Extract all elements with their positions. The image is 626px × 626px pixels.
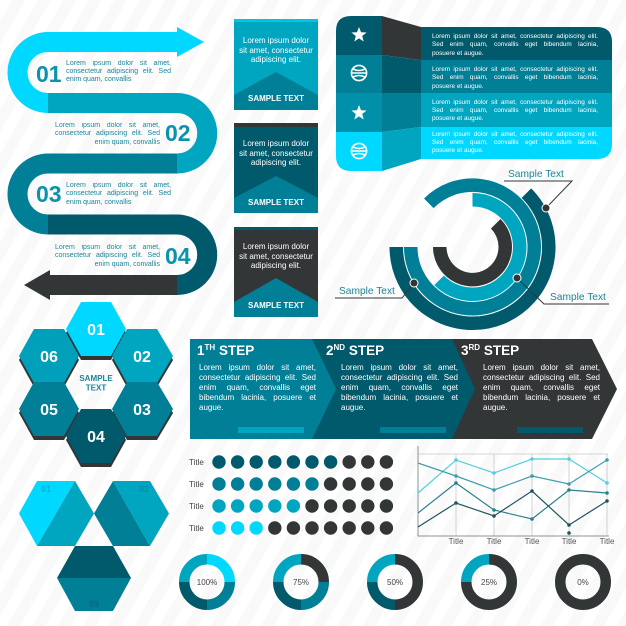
hexagon 03 split [57, 546, 131, 611]
segment 5 arrow [24, 270, 177, 300]
step 04 text: Lorem ipsum dolor sit amet, [55, 244, 160, 251]
step 3 body: Lorem ipsum dolor sit amet, [483, 363, 600, 372]
step 2 body: Lorem ipsum dolor sit amet, [341, 363, 458, 372]
hexagon 02 split: 02 [139, 484, 149, 494]
hexagon 05 [19, 382, 79, 436]
step 04 text: enim quam, convallis [95, 261, 160, 268]
callout top right [504, 169, 572, 212]
panel: sample card 2: sit amet, consectetur [239, 149, 313, 158]
step 3 bar [517, 427, 583, 433]
step 1 body [199, 363, 316, 415]
row text 4: Lorem ipsum dolor sit amet, consectetur adipiscing elit. [432, 130, 598, 138]
donut 100%: 100% [197, 578, 217, 587]
hexagon cluster [19, 302, 173, 467]
step 3 heading: 3RD STEP [461, 343, 519, 358]
step 03 text: Lorem ipsum dolor sit amet, [66, 182, 171, 189]
row 2 [189, 477, 393, 491]
center label: TEXT [86, 384, 106, 392]
step 3 body: enim quam, convallis eget [483, 383, 600, 392]
step 3 body: consectetur adipiscing elit. Sed [483, 373, 600, 382]
panel: sample card 1: Lorem ipsum dolor [243, 36, 309, 45]
step 01 number: 01 [36, 61, 62, 87]
row text 2: Sed enim quam, convallis eget bibendum lacinia, [432, 74, 598, 81]
step 1 body: bibendum lacinia, posuere et [199, 393, 316, 402]
axis labels: Title [449, 537, 464, 546]
row text 2: Lorem ipsum dolor sit amet, consectetur adipiscing elit. [432, 66, 598, 73]
dot matrix chart [189, 455, 393, 535]
row text 3: posuere et augue. [432, 115, 484, 122]
callout left [335, 279, 418, 298]
row 3: Title [189, 502, 204, 511]
step 1 heading: 1TH STEP [197, 343, 254, 358]
row text 4 [432, 130, 598, 156]
row text 1: posuere et augue. [432, 50, 484, 57]
callout lower right [513, 274, 609, 304]
step 02 text: enim quam, convallis [95, 139, 160, 146]
row text 3: Lorem ipsum dolor sit amet, consectetur adipiscing elit. [432, 98, 598, 106]
panel: sample card 3: adipiscing elit. [251, 261, 301, 270]
series 1 [418, 457, 609, 493]
ribbon folds [382, 16, 421, 171]
panel: sample card 1: sit amet, consectetur [239, 46, 313, 55]
step 03 text: enim quam, convallis [66, 199, 131, 206]
step 2 body: bibendum lacinia, posuere et [341, 393, 458, 402]
donut 75%: 75% [293, 578, 309, 587]
hexagon 02 [112, 329, 173, 383]
donut 100% [184, 559, 230, 605]
row 1 [189, 455, 393, 469]
step 1 body: Lorem ipsum dolor sit amet, [199, 363, 316, 372]
step 04 number: 04 [165, 243, 191, 269]
row text 2: posuere et augue. [432, 83, 484, 90]
segment 3 [17, 164, 177, 224]
hexagon 05: 05 [40, 402, 58, 419]
segment 2 [48, 103, 207, 164]
panel: sample card 2: SAMPLE TEXT [248, 198, 304, 207]
step 2 bar [380, 427, 446, 433]
donut 75% [278, 559, 324, 605]
hexagon 03 [112, 382, 173, 436]
hexagon 04: 04 [87, 429, 105, 446]
hexagon 01: 01 [87, 322, 105, 339]
row text 3 [432, 98, 598, 124]
hexagon 06 [19, 329, 79, 383]
axis labels: Title [600, 537, 615, 546]
panel: three step chevrons [190, 339, 617, 439]
step 3 body: bibendum lacinia, posuere et [483, 393, 600, 402]
step 04 text [55, 244, 160, 270]
hexagon 03 split: 03 [89, 599, 99, 609]
axis labels: Title [562, 537, 577, 546]
donut 25%: 25% [481, 578, 497, 587]
step 04 text: consectetur adipiscing elit. Sed [55, 252, 160, 259]
hexagon 01 [66, 302, 126, 356]
step 02 text: Lorem ipsum dolor sit amet, [55, 122, 160, 129]
hexagon 04 [66, 409, 126, 463]
radial arc chart [335, 169, 609, 323]
hexagon shadows [19, 306, 173, 467]
step 01 text: Lorem ipsum dolor sit amet, [66, 60, 171, 66]
step 03 text [66, 182, 171, 208]
step 01 text: consectetur adipiscing elit. Sed [66, 68, 171, 75]
callout left: Sample Text [339, 286, 395, 297]
hexagon 02: 02 [133, 349, 151, 366]
third arc [439, 200, 520, 294]
series 2 [418, 458, 609, 492]
panel: sample card 1 [234, 19, 318, 110]
panel: sample card 3: sit amet, consectetur [239, 252, 313, 261]
row 1: Title [189, 458, 204, 467]
hexagon 06: 06 [40, 349, 58, 366]
hexagon 03: 03 [133, 402, 151, 419]
hexagon 01 split [19, 481, 94, 546]
step 2 body [341, 363, 458, 415]
step 3 body [483, 363, 600, 415]
panel: sample card 3: Lorem ipsum dolor [243, 242, 309, 251]
step 3 body: augue. [483, 403, 507, 412]
step 1 bar [238, 427, 304, 433]
row text 3: Sed enim quam, convallis eget bibendum lacinia, [432, 107, 598, 114]
series 3 [418, 481, 609, 521]
step 2 body: enim quam, convallis eget [341, 383, 458, 392]
row text 2 [432, 66, 598, 92]
hexagon 02 split [94, 481, 169, 546]
step 3 chevron [440, 339, 617, 439]
step 2 heading: 2ND STEP [326, 343, 384, 358]
segment 1 arrow [18, 27, 204, 103]
donut 50% [372, 559, 418, 605]
donut 0% [560, 559, 606, 605]
row text 4: posuere et augue. [432, 147, 484, 154]
axis labels: Title [525, 537, 540, 546]
ribbon right rows [421, 27, 612, 159]
donut 50%: 50% [387, 578, 403, 587]
step 1 body: augue. [199, 403, 223, 412]
row 3 [189, 499, 393, 513]
row text 4: Sed enim quam, convallis eget bibendum lacinia, [432, 139, 598, 146]
step 01 text: enim quam, convallis [66, 76, 131, 83]
inner arc [440, 224, 505, 280]
row text 1: Lorem ipsum dolor sit amet, consectetur adipiscing elit. [432, 33, 598, 40]
step 2 body: augue. [341, 403, 365, 412]
row 4 [189, 521, 393, 535]
step 02 number: 02 [165, 120, 191, 146]
panel: sample card 2: adipiscing elit. [251, 158, 301, 167]
center label: SAMPLE [79, 374, 113, 383]
row text 1: Sed enim quam, convallis eget bibendum lacinia, [432, 41, 598, 48]
panel: folded ribbon list [336, 16, 612, 171]
segment 4 [48, 224, 207, 285]
step 02 text [55, 122, 160, 148]
split hexagon trio [19, 481, 169, 611]
callout lower right: Sample Text [550, 292, 606, 303]
step 1 body: consectetur adipiscing elit. Sed [199, 373, 316, 382]
step 03 text: consectetur adipiscing elit. Sed [66, 190, 171, 197]
step 2 body: consectetur adipiscing elit. Sed [341, 373, 458, 382]
hexagon 01 split: 01 [41, 484, 51, 494]
row 2: Title [189, 480, 204, 489]
panel: sample card 2: Lorem ipsum dolor [243, 139, 309, 148]
line chart [418, 446, 615, 546]
panel: sample card 3: SAMPLE TEXT [248, 301, 304, 310]
step 02 text: consectetur adipiscing elit. Sed [55, 130, 160, 137]
axis labels: Title [487, 537, 502, 546]
step 2 chevron [300, 339, 475, 439]
outer arc [396, 193, 549, 323]
step 1 chevron [190, 339, 336, 439]
row text 1 [432, 33, 598, 59]
donut 25% [466, 559, 512, 605]
second arc [411, 185, 534, 309]
step 1 body: enim quam, convallis eget [199, 383, 316, 392]
serpentine process arrow [17, 27, 207, 300]
icon: globe [351, 143, 367, 159]
step 01 text [66, 60, 171, 86]
series 4 [418, 489, 609, 535]
step 03 number: 03 [36, 181, 62, 207]
panel: sample card 1: SAMPLE TEXT [248, 94, 304, 103]
panel: sample card 2 [234, 123, 318, 213]
icon: globe [351, 65, 367, 81]
donut 0%: 0% [577, 578, 589, 587]
panel: sample card 1: adipiscing elit. [251, 55, 301, 64]
panel: sample card 3 [234, 227, 318, 317]
axis labels [449, 537, 615, 546]
ribbon left tabs [336, 16, 382, 171]
icon: star [351, 105, 367, 120]
callout top right: Sample Text [508, 169, 564, 180]
row 4: Title [189, 524, 204, 533]
icon: star [351, 27, 367, 42]
